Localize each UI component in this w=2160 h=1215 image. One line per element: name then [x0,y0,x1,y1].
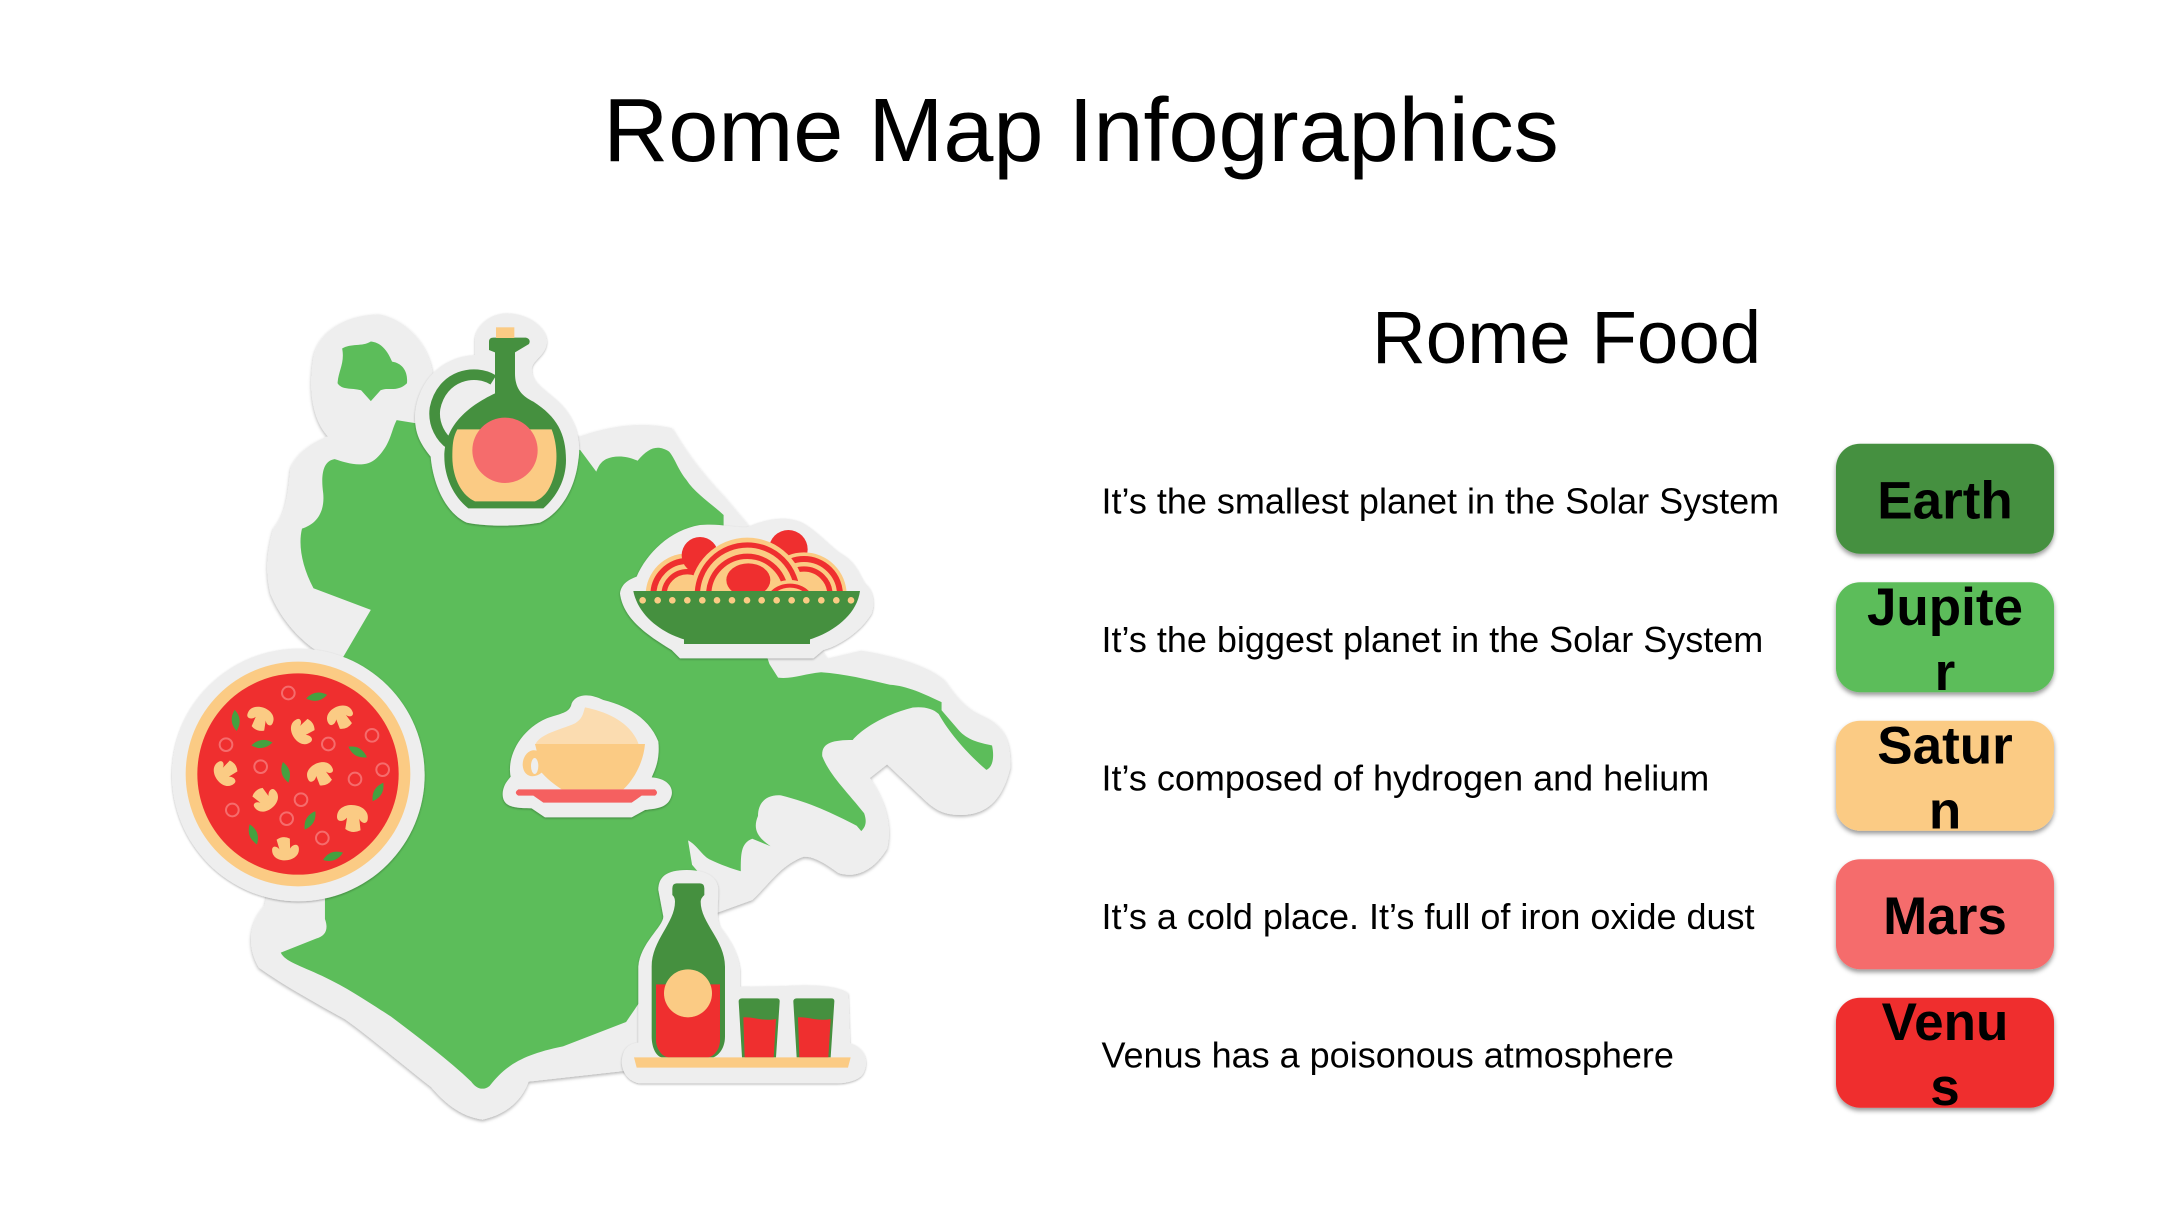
cup [523,744,645,789]
icon: spaghetti bowl [620,519,873,658]
jug handle [435,375,493,444]
icon: pizza [172,649,425,901]
bowl dots [639,597,854,604]
drinks sticker [622,870,866,1083]
glass one [739,998,780,1057]
pepperoni rings [220,687,389,844]
basil leaves [231,691,387,864]
label: Jupiter [1836,578,2054,702]
text: Jupiter description: It’s the biggest planet in the Solar System [1102,619,1763,660]
map of Rome [251,314,1010,1120]
noodles and meatballs [646,530,846,591]
label: Jupiter: Jupite [1867,578,2023,637]
bowl sticker [620,519,873,658]
oil [452,429,556,501]
label: Earth: Earth [1877,472,2013,531]
island [338,342,407,401]
bottle label [664,969,712,1017]
oil sticker [415,313,579,526]
text: Saturn description: It’s composed of hydrogen and helium [1102,757,1709,798]
mushrooms [209,701,369,861]
label: Venus [1836,993,2054,1117]
icon: olive oil jug [415,313,579,526]
text: Mars description: It’s a cold place. It’s full of iron oxide dust [1102,896,1755,937]
glass two [793,998,834,1057]
bottle [652,883,725,1057]
pizza sticker [172,649,425,901]
cork [496,327,514,338]
mainland [281,420,993,1089]
label: Mars: Mars [1883,887,2007,946]
map sticker backing [251,314,1010,1120]
crust [186,662,410,886]
bottle liquid [656,984,720,1057]
cup handle opening [531,758,538,774]
text: Earth description: It’s the smallest planet in the Solar System [1102,480,1779,521]
saucer [516,789,657,803]
icon: bottle and glasses [622,870,866,1083]
sauce [197,673,399,875]
bowl [633,591,860,644]
cup sticker [503,695,672,817]
label: Mars [1836,859,2054,969]
heading: Rome Food: Rome Food [1372,296,1761,379]
label: Venus: s [1930,1058,1960,1117]
icon: cappuccino cup [503,695,672,817]
label: Venus: Venu [1882,993,2008,1052]
label: Saturn: Satur [1877,716,2013,776]
jug label [472,418,538,483]
foam [535,707,638,745]
label: Jupiter: r [1935,643,1955,702]
text: Venus description: Venus has a poisonous atmosphere [1102,1034,1674,1075]
label: Saturn [1836,716,2054,840]
jug body [444,338,566,508]
title: Rome Map Infographics [603,81,1559,181]
label: Saturn: n [1929,782,1961,840]
tray [634,1057,851,1068]
label: Earth [1836,444,2054,554]
